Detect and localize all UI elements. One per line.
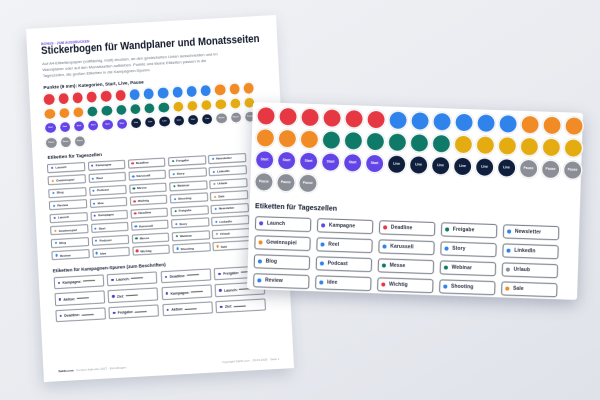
- day label sticker grid: Review: [57, 203, 68, 207]
- dot sticker grid enlarged: [254, 106, 584, 194]
- sticker: Wichtig: [377, 277, 434, 294]
- sticker: LinkedIn: LinkedIn: [514, 248, 536, 255]
- dot sticker grid enlarged: Pause: [281, 180, 291, 185]
- campaign label sticker grid: Kampagne:: [62, 280, 82, 285]
- campaign label sticker grid: Launch:: [116, 277, 130, 282]
- day label sticker grid: Reel: [96, 176, 103, 180]
- day label sticker grid: Wichtig: [138, 198, 149, 203]
- dot sticker grid enlarged: Live: [503, 166, 510, 170]
- sticker: Blog: Blog: [265, 259, 277, 265]
- sheet title: Stickerbogen für Wandplaner und Monatsseiten: [41, 33, 260, 57]
- sticker: Kampagne: Kampagne: [329, 223, 355, 229]
- day label sticker grid: Reel: [99, 226, 105, 230]
- dot sticker grid: Live: [163, 121, 167, 123]
- dot sticker grid enlarged: Pause: [303, 181, 313, 186]
- dot sticker grid enlarged: Live: [481, 165, 488, 169]
- day label sticker grid: Story: [179, 221, 187, 226]
- sticker: Gewinnspiel: [254, 235, 311, 251]
- dot sticker grid: Live: [134, 122, 138, 124]
- day label sticker grid: Podcast: [99, 238, 112, 243]
- description text: [42, 52, 218, 79]
- sticker: Webinar: [439, 260, 496, 277]
- sticker: Sale: [501, 281, 558, 298]
- day label sticker grid: Podcast: [97, 188, 109, 193]
- sticker: Reel: Reel: [328, 242, 339, 248]
- dot sticker grid: Pause: [233, 117, 239, 119]
- dot sticker grid enlarged: Live: [393, 162, 400, 166]
- panel: enlarged sticker detail card: [247, 102, 583, 300]
- campaign label sticker grid: Aktion:: [63, 297, 75, 301]
- day label sticker grid: Urlaub: [220, 231, 230, 236]
- sticker: Podcast: Podcast: [327, 261, 348, 267]
- dot sticker grid: Pause: [247, 116, 253, 118]
- dot sticker grid: Pause: [77, 140, 83, 142]
- day label sticker grid: Gewinnspiel: [56, 177, 74, 182]
- day label sticker grid: Karussell: [139, 223, 153, 228]
- sticker: Karussell: [378, 239, 435, 255]
- dot sticker grid: Live: [148, 121, 152, 124]
- dot sticker grid enlarged: Pause: [545, 167, 556, 172]
- dot sticker grid enlarged: Live: [415, 163, 422, 167]
- sticker: Kampagne: [316, 218, 373, 234]
- dot sticker grid: Start: [63, 126, 67, 129]
- panel: printed A4 sticker sheet: [26, 15, 294, 382]
- day label sticker grid: Review: [60, 253, 71, 257]
- day label sticker grid: Sale: [218, 194, 225, 198]
- description text: Wandplaner oder auf den Monatsseiten aufkleben. Punkte und kleine Etiketten passen in die: [42, 58, 206, 73]
- sticker: Freigabe: [440, 222, 497, 238]
- day label sticker grid: Newsletter: [216, 156, 232, 161]
- dot sticker grid: Start: [120, 123, 124, 125]
- description text: Tageszellen, die großen Etiketten in die Kampagnen-Spuren.: [43, 68, 151, 79]
- day label sticker grid: Urlaub: [217, 181, 227, 186]
- sticker: Deadline: Deadline: [391, 225, 413, 231]
- day label sticker grid: Kampagne: [98, 213, 114, 218]
- dot sticker grid: Start: [77, 125, 81, 128]
- campaign label sticker grid: Deadline:: [170, 274, 186, 279]
- day label sticker grid: Shooting: [180, 246, 194, 251]
- sticker: LinkedIn: [502, 243, 559, 259]
- eyebrow label: BONUS · ZUM AUSDRUCKEN: [41, 39, 90, 46]
- sticker: Urlaub: [501, 262, 558, 279]
- dot sticker grid enlarged: Start: [305, 159, 312, 164]
- sticker: Gewinnspiel: Gewinnspiel: [266, 240, 297, 247]
- sticker: Reel: [316, 237, 373, 253]
- campaign label sticker grid: Ziel:: [225, 304, 232, 309]
- sticker: Newsletter: Newsletter: [515, 229, 541, 236]
- day label grid enlarged: [252, 216, 560, 298]
- heading: day labels: Etiketten für Tageszellen: [47, 152, 102, 160]
- day label sticker grid: Story: [177, 171, 185, 176]
- day label sticker grid: Karussell: [136, 173, 150, 178]
- sticker: Karussell: Karussell: [390, 244, 414, 251]
- sticker: Idee: [315, 275, 372, 292]
- sticker: Idee: Idee: [327, 280, 337, 286]
- dot sticker grid: Pause: [63, 141, 69, 143]
- day label sticker grid: Gewinnspiel: [59, 227, 77, 232]
- campaign label sticker grid: Freigabe:: [118, 310, 134, 315]
- campaign label sticker grid: [54, 266, 266, 322]
- dot sticker grid: [42, 81, 256, 150]
- dot sticker grid: Pause: [48, 141, 54, 144]
- day label sticker grid: LinkedIn: [219, 219, 232, 223]
- dot sticker grid: Live: [177, 120, 181, 122]
- dot sticker grid enlarged: Live: [459, 164, 466, 169]
- dot sticker grid enlarged: Pause: [567, 168, 578, 172]
- heading: campaign labels: Etiketten für Kampagnen-Spuren (zum Beschriften): [53, 262, 166, 273]
- day label sticker grid: LinkedIn: [217, 169, 230, 173]
- heading: dots: Punkte (9 mm): Kategorien, Start, Live, Pause: [43, 79, 144, 90]
- sticker: Review: Review: [265, 278, 283, 284]
- sticker: Podcast: [315, 256, 372, 272]
- campaign label sticker grid: Launch:: [224, 287, 238, 292]
- sticker: Story: [440, 241, 497, 257]
- sticker: Webinar: Webinar: [451, 265, 472, 272]
- sticker: Sale: Sale: [513, 286, 524, 292]
- sticker: Review: [253, 273, 310, 289]
- campaign label sticker grid: Aktion:: [171, 307, 184, 312]
- sticker: Story: Story: [452, 246, 466, 252]
- dot sticker grid enlarged: Start: [283, 159, 290, 163]
- day label sticker grid: Deadline: [136, 161, 149, 165]
- day label sticker grid: Webinar: [177, 184, 190, 188]
- dot sticker grid enlarged: Start: [261, 158, 268, 162]
- day label sticker grid: Kampagne: [96, 163, 112, 168]
- day label sticker grid: Launch: [58, 215, 69, 220]
- day label sticker grid: Messe: [137, 186, 147, 190]
- day label sticker grid: Freigabe: [178, 208, 192, 213]
- day label sticker grid: Newsletter: [219, 206, 234, 211]
- dot sticker grid enlarged: Live: [437, 164, 444, 168]
- footer right: Copyright Sabbi.com · 26.03.2026 · Seite 1: [222, 357, 280, 364]
- day label sticker grid: Wichtig: [140, 248, 152, 253]
- description text: Auf A4-Etikettenpapier (vollflächig, matt) drucken, an den gestrichelten Linien ausschneiden und im: [42, 52, 218, 67]
- footer left: Sabbi.com · Content-Kalender 2027 · Einzelbogen: [58, 365, 126, 373]
- campaign label sticker grid: Deadline:: [64, 313, 80, 318]
- dot sticker grid enlarged: Start: [327, 160, 334, 164]
- sticker: Urlaub: Urlaub: [513, 267, 530, 273]
- heading: enlarged day labels: Etiketten für Tageszellen: [255, 204, 337, 213]
- sticker: Shooting: [439, 279, 496, 296]
- sticker: Deadline: [378, 220, 435, 236]
- sticker: Wichtig: Wichtig: [389, 282, 408, 289]
- dot sticker grid enlarged: Pause: [259, 180, 269, 184]
- dot sticker grid enlarged: Pause: [523, 166, 534, 171]
- sticker: Launch: [254, 216, 311, 232]
- campaign label sticker grid: Freigabe:: [223, 271, 239, 276]
- day label sticker grid: Launch: [55, 165, 67, 170]
- sticker: Launch: Launch: [267, 221, 285, 227]
- day label sticker grid: Webinar: [180, 233, 192, 238]
- campaign label sticker grid: Kampagne:: [170, 290, 190, 295]
- day label sticker grid: Shooting: [178, 196, 191, 201]
- campaign label sticker grid: Ziel:: [117, 294, 124, 298]
- dot sticker grid enlarged: Start: [371, 161, 378, 166]
- day label sticker grid: [47, 153, 250, 260]
- sticker: Messe: Messe: [389, 263, 405, 269]
- sticker: Shooting: Shooting: [451, 284, 474, 291]
- dot sticker grid: Start: [91, 125, 96, 127]
- sticker: Newsletter: [502, 224, 559, 240]
- dot sticker grid: Live: [205, 118, 209, 121]
- day label sticker grid: Messe: [140, 236, 149, 240]
- day label sticker grid: Blog: [57, 191, 64, 195]
- day label sticker grid: Freigabe: [176, 159, 189, 163]
- sticker: Freigabe: Freigabe: [453, 227, 475, 233]
- sticker: Blog: [253, 254, 310, 270]
- dot sticker grid: Start: [105, 124, 110, 126]
- day label sticker grid: Deadline: [138, 211, 151, 215]
- dot sticker grid: Start: [48, 127, 53, 129]
- day label sticker grid: Sale: [221, 244, 227, 248]
- day label sticker grid: Idee: [97, 201, 104, 205]
- sticker: Messe: [377, 258, 434, 274]
- dot sticker grid: Pause: [219, 117, 225, 120]
- dot sticker grid enlarged: Start: [349, 161, 356, 165]
- day label sticker grid: Blog: [59, 241, 66, 245]
- dot sticker grid: Live: [191, 119, 195, 121]
- day label sticker grid: Idee: [100, 251, 106, 255]
